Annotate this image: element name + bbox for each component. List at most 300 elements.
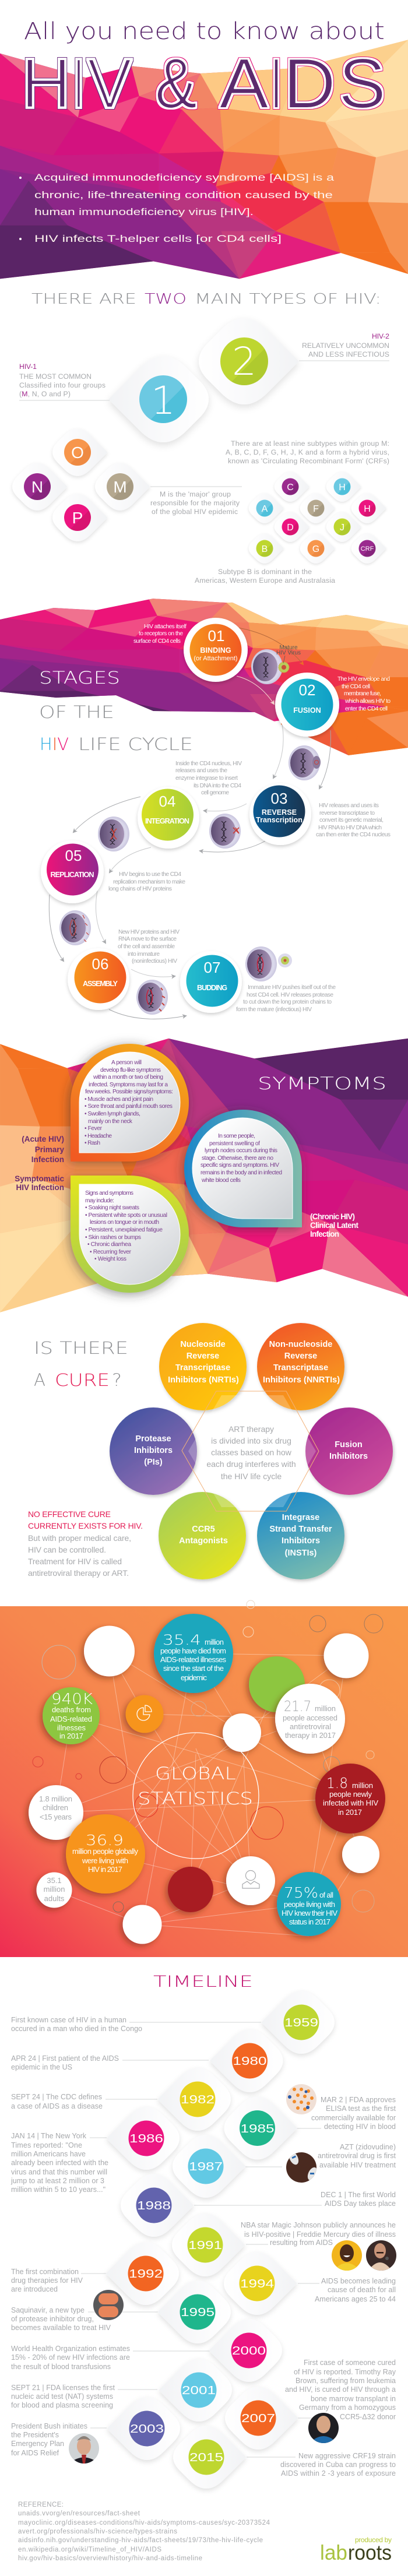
card: primary infection: • Swollen lymph glands, <box>85 1111 140 1117</box>
card: symptomatic HIV infection: • Skin rashes or bumps <box>85 1234 141 1241</box>
left timeline events: JAN 14 | The New York <box>11 2132 87 2140</box>
right timeline events: and HIV, is cured of HIV through a <box>285 2385 396 2394</box>
card: clinical latent infection: In some people, <box>218 1133 255 1139</box>
stage 06 description <box>118 929 180 965</box>
card: primary infection: • Rash <box>85 1140 100 1146</box>
stat: 35.1 million adults: million <box>44 1885 65 1894</box>
stat: 940K deaths: AIDS-related <box>50 1715 92 1723</box>
left timeline events: million Americans have <box>11 2150 86 2158</box>
HIV-1 text: (M, N, O and P) <box>19 390 71 398</box>
year 1992 <box>105 2242 179 2305</box>
HIV-2 text <box>302 332 389 358</box>
stage 04 integration: INTEGRATION <box>145 817 189 825</box>
stat: 36.9 million living with HIV: million people globally <box>72 1847 139 1856</box>
subtype diamonds: J <box>340 523 344 533</box>
HIV-1 text: THE MOST COMMON <box>19 372 92 381</box>
group M note: responsible for the majority <box>150 499 240 507</box>
cell: mature HIV virus binding <box>251 645 301 684</box>
ART therapy text: each drug interferes with <box>206 1459 296 1469</box>
label: clinical latent infection: Clinical Latent <box>310 1221 359 1230</box>
stat: 35.4 million died: people have died from <box>160 1646 226 1655</box>
stage 05 description: HIV begins to use the CD4 <box>119 871 181 878</box>
stage 02 description: which allows HIV to <box>344 698 391 705</box>
stage 03 reverse transcription <box>249 783 311 845</box>
left timeline events: First known case of HIV in a human <box>11 2016 126 2024</box>
no effective cure text: CURRENTLY EXISTS FOR HIV. <box>28 1521 143 1530</box>
left timeline events: The first combination <box>11 2268 79 2276</box>
cell: reverse transcription <box>209 814 241 849</box>
label: primary infection <box>22 1135 64 1164</box>
stat: 1.8 million children: children <box>43 1803 68 1812</box>
right timeline events: cause of death for all <box>328 2286 396 2294</box>
group M note: M is the 'major' group <box>160 490 231 498</box>
stat: 1.8 million newly infected: infected with HIV <box>323 1799 378 1807</box>
year 2007: 2007 <box>241 2412 275 2425</box>
photo: Magic Johnson <box>332 2240 362 2271</box>
stage 05 replication: REPLICATION <box>50 871 94 879</box>
card: clinical latent infection <box>184 1110 302 1227</box>
drug class: INSTIs <box>257 1492 344 1579</box>
references: en.wikipedia.org/wiki/Timeline_of_HIV/AIDS <box>18 2546 161 2553</box>
label: clinical latent infection: Infection <box>310 1230 339 1238</box>
year 1995 <box>157 2281 231 2343</box>
card: primary infection: • Headache <box>85 1133 112 1139</box>
stat: 75 percent knew status <box>277 1872 341 1936</box>
icon: pie chart <box>126 1695 163 1733</box>
drug class: NRTIs: Inhibitors (NRTIs) <box>168 1375 239 1385</box>
right timeline events: NBA star Magic Johnson publicly announces he <box>241 2221 396 2229</box>
stat: 75 percent knew status: 75% <box>284 1884 318 1901</box>
HIV-1 diamond <box>19 356 209 442</box>
subtype B note <box>195 568 335 585</box>
group O, N, M, P diamonds: N <box>31 478 43 496</box>
left timeline events: SEPT 24 | The CDC defines <box>11 2093 102 2101</box>
drug class: NRTIs: Nucleoside <box>180 1340 226 1349</box>
year 2015 <box>173 2426 247 2489</box>
stage 07 budding: BUDDING <box>197 984 227 992</box>
left timeline events: million within 5 to 10 years..." <box>11 2186 105 2194</box>
stage 05 replication: 05 <box>65 847 82 864</box>
heading: is there a cure: IS THERE <box>34 1338 128 1358</box>
year 1991: 1991 <box>188 2239 222 2252</box>
HIV-1 text: Classified into four groups <box>19 381 105 389</box>
year 1980 <box>210 2029 283 2092</box>
left timeline events: nucleic acid test (NAT) systems <box>11 2392 113 2401</box>
drug class: INSTIs: Integrase <box>282 1513 319 1522</box>
stage 04 description: its DNA into the CD4 <box>194 783 241 789</box>
stage 05 replication <box>41 840 104 903</box>
card: clinical latent infection: lymph nodes occurs during this <box>205 1148 277 1154</box>
no effective cure text: But with proper medical care, <box>28 1533 131 1543</box>
references: mayoclinic.org/diseases-conditions/hiv-aids/symptoms-causes/syc-20373524 <box>18 2519 270 2526</box>
cell: mature HIV virus binding: Mature <box>279 645 298 651</box>
stage 06 description: of the cell and assemble <box>118 944 175 950</box>
subtype diamonds: D <box>287 523 294 533</box>
right timeline events: commercially available for <box>311 2114 396 2122</box>
year 1987: 1987 <box>189 2160 223 2173</box>
left timeline events: a case of AIDS as a disease <box>11 2102 103 2110</box>
subtypes note: known as 'Circulating Recombinant Form' (CRFs) <box>228 457 389 465</box>
subtype diamonds: F <box>313 504 319 514</box>
hexagon overlay <box>182 1391 319 1511</box>
label: primary infection: (Acute HIV) <box>22 1135 64 1143</box>
stage 04 description: enzyme integrase to insert <box>175 775 238 782</box>
heading: stages of the HIV life cycle: OF THE <box>39 702 114 722</box>
decorative circles lower <box>122 1836 379 1944</box>
HIV-2 text: HIV-2 <box>372 332 389 340</box>
left timeline events: Times reported: "One <box>11 2141 82 2149</box>
right timeline events: is HIV-positive | Freddie Mercury dies of illness <box>244 2230 396 2239</box>
photo: President Bush <box>69 2433 99 2464</box>
drug class: protease inhibitors <box>110 1407 197 1495</box>
left timeline events: virus and that this number will <box>11 2168 107 2176</box>
intro bullet text: HIV infects T-helper cells [or CD4 cells] <box>34 233 282 244</box>
card: symptomatic HIV infection <box>71 1176 189 1293</box>
subtype diamonds: CRF <box>361 546 374 552</box>
panel: symptoms <box>0 1039 408 1312</box>
stage 01 description: HIV attaches itself <box>144 624 187 630</box>
centre ring: global statistics: STATISTICS <box>138 1789 253 1808</box>
stat: 36.9 million living with HIV: HIV in 2017 <box>88 1865 122 1874</box>
stage 06 description: RNA move to the surface <box>118 936 177 942</box>
card: primary infection: • Muscle aches and joint pain <box>85 1096 153 1103</box>
drug class: NRTIs: Reverse <box>187 1352 219 1361</box>
heading: is there a cure: ? <box>112 1370 122 1390</box>
stage 02 description: the CD4 cell <box>342 684 370 690</box>
stat: 1.8 million children <box>29 1785 83 1840</box>
year 1991 <box>172 2213 245 2276</box>
year 1959 <box>261 1991 335 2054</box>
stage 06 assembly: 06 <box>92 955 108 973</box>
drug class: fusion inhibitors: Fusion <box>335 1440 363 1449</box>
decorative white circles <box>84 1626 368 1678</box>
right timeline events: Germany from a homozygous <box>299 2403 396 2412</box>
intro bullet text <box>19 172 335 244</box>
stage 05 description <box>108 871 185 892</box>
stage 03 description: HIV RNA to HIV DNA which <box>318 825 382 831</box>
left timeline events: of protease inhibitor drug, <box>11 2315 94 2323</box>
subtype diamonds: G <box>312 544 319 554</box>
left timeline events <box>10 2016 142 2457</box>
stat: 35.4 million died: epidemic <box>181 1673 207 1682</box>
stage 03 reverse transcription: REVERSE <box>262 808 297 817</box>
year 2000: 2000 <box>232 2345 266 2357</box>
subtype diamonds: C <box>287 483 294 492</box>
intro bullet text: chronic, life-threatening condition caused by the <box>34 189 333 200</box>
heading: two main types: MAIN TYPES OF HIV: <box>195 290 381 307</box>
left timeline events: for blood and plasma screening <box>11 2401 113 2409</box>
right timeline events: New aggressive CRF19 strain <box>298 2452 396 2460</box>
card: primary infection: A person will <box>111 1060 142 1066</box>
drug class: INSTIs: Inhibitors <box>282 1536 320 1546</box>
references: aidsinfo.nih.gov/understanding-hiv-aids/fact-sheets/19/73/the-hiv-life-cycle <box>18 2537 263 2544</box>
stat: 21.7 million on therapy: antiretroviral <box>290 1722 331 1731</box>
drug class: NRTIs: Transcriptase <box>175 1363 230 1373</box>
card: clinical latent infection: persistent swelling of <box>209 1141 260 1147</box>
stage 01 binding: BINDING <box>200 646 231 654</box>
stage 02 fusion: 02 <box>299 681 315 699</box>
ART therapy text: is divided into six drug <box>211 1436 291 1445</box>
stat: 940K deaths: in 2017 <box>59 1732 83 1740</box>
photo: Timothy Ray Brown <box>308 2413 339 2443</box>
subtype diamonds: B <box>262 544 268 554</box>
arrows between stages <box>49 628 330 1019</box>
left timeline events: APR 24 | First patient of the AIDS <box>11 2054 119 2063</box>
year 2003: 2003 <box>130 2423 164 2436</box>
title: HIV and AIDS: D <box>283 44 336 123</box>
green accent circle <box>249 1656 305 1712</box>
heading: two main types: TWO <box>145 290 187 307</box>
right timeline events: available HIV treatment <box>319 2161 396 2169</box>
heading: is there a cure: A <box>34 1370 45 1390</box>
card: primary infection: few weeks. Possible signs/symptoms: <box>85 1089 173 1095</box>
year 1985: 1985 <box>240 2123 274 2135</box>
stage 01 binding: 01 <box>208 627 224 645</box>
stage 01 description: to receptors on the <box>139 631 183 637</box>
right timeline events: discovered in Cuba can progress to <box>280 2461 396 2469</box>
stage 05 description: replication mechanism to make <box>113 879 185 885</box>
stat: 35.4 million died: AIDS-related illnesses <box>160 1655 226 1664</box>
card: primary infection: infected. Symptoms may last for a <box>89 1082 168 1088</box>
stat: 1.8 million newly infected: in 2017 <box>338 1808 362 1817</box>
card: symptomatic HIV infection: • Soaking night sweats <box>85 1205 139 1211</box>
subtype B note: Subtype B is dominant in the <box>218 568 312 576</box>
group O, N, M, P diamonds: M <box>113 478 127 496</box>
stat: 35.1 million adults <box>36 1872 72 1908</box>
year 2000 <box>209 2319 282 2382</box>
logo: produced by labroots: roots <box>348 2540 392 2564</box>
label: clinical latent infection: (Chronic HIV) <box>310 1212 355 1221</box>
group M note: of the global HIV epidemic <box>152 508 238 516</box>
no effective cure text: NO EFFECTIVE CURE <box>28 1509 111 1519</box>
right timeline events: DEC 1 | The first World <box>321 2191 396 2199</box>
year 1982: 1982 <box>181 2093 214 2106</box>
HIV-2 text: RELATIVELY UNCOMMON <box>302 342 389 350</box>
group O, N, M, P diamonds: O <box>71 444 84 462</box>
stage 06 assembly <box>68 948 129 1010</box>
year 1987 <box>173 2135 246 2198</box>
card: symptomatic HIV infection: • Chronic diarrhea <box>87 1241 131 1248</box>
stat: 1.8 million newly infected: million <box>352 1781 373 1790</box>
right timeline events: bone marrow transplant in <box>311 2395 396 2403</box>
left timeline events: drug therapies for HIV <box>11 2276 83 2285</box>
year 1980: 1980 <box>233 2055 267 2068</box>
drug class: NNRTIs: Non-nucleoside <box>269 1340 332 1349</box>
heading: stages of the HIV life cycle <box>39 668 193 754</box>
stage 05 description: long chains of HIV proteins <box>108 886 172 892</box>
HIV-2 text: AND LESS INFECTIOUS <box>308 350 389 358</box>
card: primary infection: within a month or two of being <box>93 1074 163 1081</box>
drug class: INSTIs: (INSTIs) <box>285 1549 317 1558</box>
drug class: fusion inhibitors: Inhibitors <box>329 1452 368 1461</box>
right timeline events: AIDS within 2 -3 years of exposure <box>281 2469 396 2478</box>
label: primary infection: Primary <box>35 1145 64 1154</box>
no effective cure text: HIV can be controlled. <box>28 1545 106 1554</box>
right timeline events: CCR5-Δ32 donor <box>340 2413 396 2421</box>
card: symptomatic HIV infection: • Persistent, unexplained fatigue <box>85 1227 163 1233</box>
stat: 75 percent knew status: HIV knew their HIV <box>282 1909 337 1917</box>
subtypes note: A, B, C, D, F, G, H, J, K and a form a hybrid virus, <box>226 448 389 456</box>
stat: 21.7 million on therapy: million <box>315 1704 336 1713</box>
right timeline events: MAR 2 | FDA approves <box>321 2096 396 2104</box>
year 1986: 1986 <box>129 2132 163 2145</box>
icon: person <box>226 1856 275 1905</box>
panel: is there a cure <box>28 1323 393 1579</box>
stage 07 description: host CD4 cell. HIV releases protease <box>247 992 333 998</box>
stage 01 description <box>133 624 187 645</box>
year 2003 <box>107 2397 180 2460</box>
stage 07 description: Immature HIV pushes itself out of the <box>248 984 336 991</box>
left timeline events: occured in a man who died in the Congo <box>11 2025 142 2033</box>
references: hiv.gov/hiv-basics/overview/history/hiv-and-aids-timeline <box>18 2555 202 2562</box>
subtype diamonds: A <box>262 504 268 514</box>
left timeline events: the President's <box>11 2431 59 2439</box>
title: HIV and AIDS: I <box>270 44 282 123</box>
group O, N, M, P diamonds <box>12 428 242 541</box>
no effective cure text: Treatment for HIV is called <box>28 1557 122 1566</box>
card: primary infection: mainly on the neck <box>88 1118 133 1125</box>
left timeline events: the result of blood transfusions <box>11 2363 111 2371</box>
stage 04 description <box>175 761 242 796</box>
references: avert.org/professionals/hiv-science/types-strains <box>18 2528 177 2535</box>
panel: global statistics <box>0 1600 408 1957</box>
left timeline events: are introduced <box>11 2285 58 2293</box>
left timeline events: for AIDS Relief <box>11 2449 59 2457</box>
stage 06 description: (noninfectious) HIV <box>132 958 177 965</box>
right timeline events: Brown, suffering from leukemia <box>296 2377 396 2385</box>
card: primary infection <box>71 1044 189 1162</box>
stage 02 description: enter the CD4 cell <box>345 706 388 712</box>
left timeline events: World Health Organization estimates <box>11 2345 130 2353</box>
card: clinical latent infection: white blood cells <box>201 1177 241 1184</box>
no effective cure text: antiretroviral therapy or ART. <box>28 1568 129 1578</box>
drug class: protease inhibitors: Protease <box>135 1434 171 1444</box>
card: clinical latent infection: specific signs and symptoms. HIV <box>201 1162 279 1169</box>
cell: integration <box>98 817 129 851</box>
subtypes note <box>226 439 389 465</box>
ART therapy text <box>206 1424 296 1481</box>
cell: budding <box>245 946 292 981</box>
photo: ELISA test plate <box>286 2084 316 2114</box>
drug class: CCR5 antagonists: Antagonists <box>179 1536 228 1546</box>
stat: 36.9 million living with HIV <box>66 1814 145 1894</box>
panel: stages of the HIV life cycle <box>0 583 408 1019</box>
title: HIV and AIDS: S <box>339 44 386 123</box>
HIV-2 diamond <box>199 318 389 404</box>
stat: 35.4 million died: million <box>205 1638 224 1646</box>
label: primary infection: Infection <box>31 1155 64 1164</box>
card: primary infection: • Fever <box>85 1125 103 1132</box>
stat: 35.4 million died: 35.4 <box>163 1632 201 1648</box>
heading: stages of the HIV life cycle: HIV <box>40 734 69 754</box>
card: symptomatic HIV infection: • Weight loss <box>94 1256 126 1262</box>
right timeline events: AIDS becomes leading <box>321 2277 396 2285</box>
card: primary infection: • Sore throat and painful mouth sores <box>85 1103 173 1110</box>
drug class: NNRTIs: Inhibitors (NNRTIs) <box>263 1375 340 1385</box>
left timeline events: President Bush initiates <box>11 2422 87 2430</box>
stage 01 binding <box>184 618 248 682</box>
label: symptomatic HIV infection <box>15 1174 64 1192</box>
drug class: INSTIs: Strand Transfer <box>269 1525 332 1534</box>
references: unaids.vvorg/en/resources/fact-sheet <box>18 2510 140 2517</box>
year 1994 <box>224 2252 297 2315</box>
right timeline events: of HIV is reported. Timothy Ray <box>294 2368 396 2376</box>
HIV-2 diamond: 2 <box>232 339 256 384</box>
year 1986 <box>106 2107 180 2170</box>
cell: fusion <box>289 745 321 780</box>
heading: symptoms: SYMPTOMS <box>258 1074 386 1093</box>
stage 03 description: convert its genetic material, <box>319 817 384 824</box>
stat: 1.8 million children: 1.8 million <box>39 1794 72 1803</box>
drug class: NRTIs <box>159 1323 247 1410</box>
stage 07 description: to cut down the long protein chains to <box>243 999 332 1005</box>
stat: 35.1 million adults: 35.1 <box>47 1876 62 1885</box>
card: primary infection: develop flu-like symptoms <box>100 1067 161 1074</box>
right timeline events: AIDS Day takes place <box>325 2200 396 2208</box>
hero polygon background <box>0 40 408 279</box>
left timeline events: Saquinavir, a new type <box>11 2306 85 2314</box>
stat: 940K deaths: illnesses <box>57 1723 86 1732</box>
label: symptomatic HIV infection: HIV Infection <box>16 1183 64 1192</box>
card: clinical latent infection: remains in the body and in infected <box>201 1170 282 1176</box>
stage 03 description: reverse transcriptase to <box>319 810 375 817</box>
stage 04 description: Inside the CD4 nucleus, HIV <box>175 761 242 767</box>
heading: is there a cure <box>34 1338 128 1390</box>
drug class: NNRTIs <box>257 1323 344 1410</box>
stage 07 budding: 07 <box>204 959 220 976</box>
drug class: protease inhibitors: Inhibitors <box>134 1446 173 1455</box>
panel: two main types of HIV <box>12 290 389 585</box>
title: all you need to know about: All you need to know about <box>24 18 385 45</box>
stat: 21.7 million on therapy <box>223 1684 345 1754</box>
stat: 940K deaths: deaths from <box>52 1705 91 1714</box>
stat: 35.1 million adults: adults <box>44 1894 65 1903</box>
stage 03 reverse transcription: Transcription <box>256 816 303 824</box>
references: REFERENCE: <box>18 2501 64 2508</box>
left timeline events: Emergency Plan <box>11 2440 64 2448</box>
stage 01 description: surface of CD4 cells <box>133 638 181 645</box>
stage 06 description: New HIV proteins and HIV <box>118 929 180 935</box>
card: clinical latent infection: stage. Otherwise, there are no <box>202 1155 273 1162</box>
stage 07 budding <box>180 951 242 1013</box>
heading: stages of the HIV life cycle: STAGES <box>39 668 120 688</box>
references <box>18 2501 270 2562</box>
statistics background <box>0 1606 408 1957</box>
stage 04 integration: 04 <box>159 793 175 810</box>
stat: 1.8 million children: <15 years <box>40 1813 72 1821</box>
right timeline events: First case of someone cured <box>304 2359 396 2367</box>
drug class: protease inhibitors: (PIs) <box>144 1458 163 1467</box>
stat: 21.7 million on therapy: therapy in 2017 <box>285 1731 336 1740</box>
title: HIV and AIDS: I <box>72 44 85 123</box>
intro bullet text: human immunodeficiency virus [HIV]. <box>34 206 254 217</box>
ART therapy text: classes based on how <box>211 1448 292 1457</box>
stat: 1.8 million newly infected: 1.8 <box>326 1775 348 1792</box>
year 1992: 1992 <box>129 2268 163 2281</box>
drug class: CCR5 antagonists: CCR5 <box>192 1525 215 1534</box>
stage 03 description <box>316 803 391 838</box>
centre ring: global statistics <box>133 1733 259 1859</box>
stage 02 fusion: FUSION <box>293 706 321 715</box>
stage 02 description: membrane fuse, <box>344 691 381 697</box>
title: HIV and AIDS: V <box>87 44 132 123</box>
card: symptomatic HIV infection: Signs and symptoms <box>85 1190 133 1196</box>
left timeline events: already been infected with the <box>11 2159 108 2167</box>
drug class: NNRTIs: Reverse <box>284 1352 317 1361</box>
left timeline events: jump to at least 2 million or 3 <box>10 2177 104 2185</box>
centre ring: global statistics: GLOBAL <box>155 1764 236 1783</box>
title: HIV and AIDS: A <box>219 44 269 123</box>
